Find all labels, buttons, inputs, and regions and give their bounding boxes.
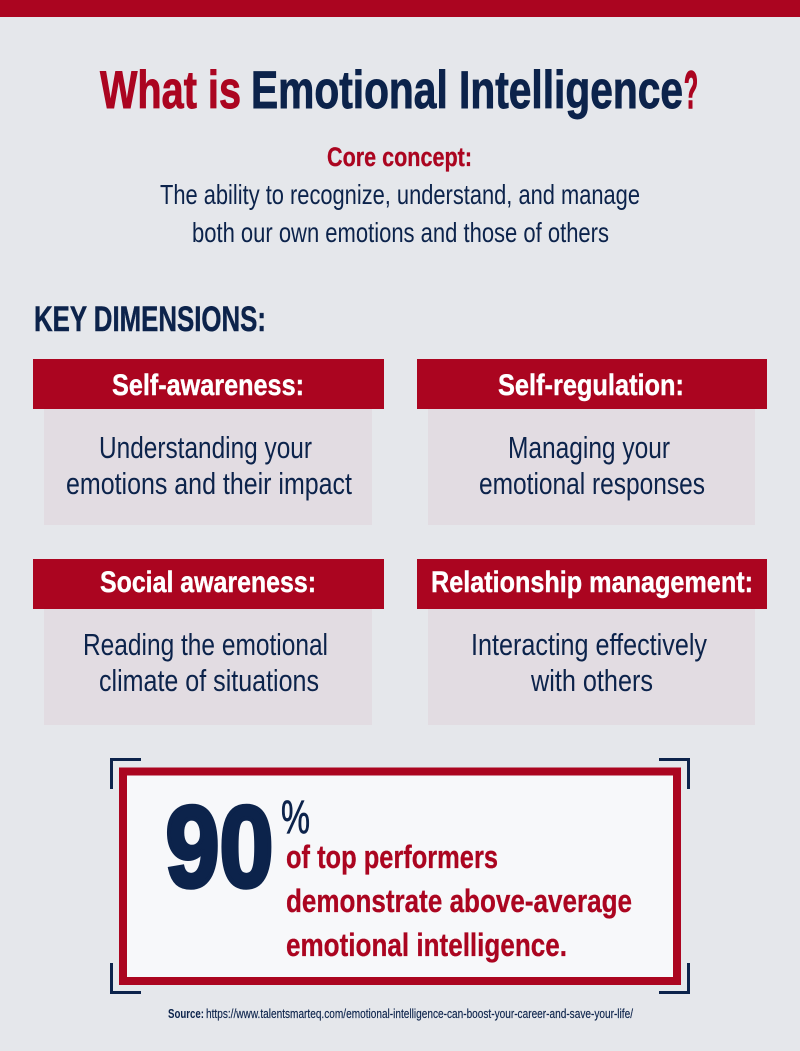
panel: self-awareness [33,359,384,525]
panel: self-awareness: Self-awareness: [112,369,304,402]
panel: self-regulation [417,359,767,525]
panel: social awareness: Social awareness: [100,566,316,599]
corner brackets [112,760,688,992]
title: Emotional Intelligence [251,61,683,120]
statistic text [286,839,632,963]
panel: relationship management: Interacting effectively [471,627,707,662]
callout frame [123,772,677,981]
panel: self-regulation: emotional responses [479,466,705,501]
core concept text block: both our own emotions and those of others [192,217,609,248]
title [100,61,698,120]
panel: relationship management: with others [530,663,653,698]
statistic text: of top performers [286,839,498,875]
big number 90: 90 [166,784,274,912]
panel: social awareness: climate of situations [99,663,319,698]
panel: self-awareness: Understanding your [99,430,312,465]
panel: self-regulation: Self-regulation: [498,369,684,402]
panel: social awareness: Reading the emotional [83,627,328,662]
panel: self-awareness: emotions and their impact [66,466,352,501]
percent sign: % [281,790,310,843]
top bar [0,0,800,17]
source line: Source: [168,1006,204,1021]
panel: social awareness [33,559,384,725]
text: ? [684,61,698,120]
panel: self-regulation: Managing your [508,430,670,465]
statistic text: emotional intelligence. [286,927,567,963]
panel: relationship management [417,559,767,725]
core concept text block: Core concept: [327,142,472,172]
callout: 90 percent statistic [112,760,688,992]
statistic text: demonstrate above-average [286,883,632,919]
title: What is [100,61,241,120]
core concept text block: The ability to recognize, understand, and manage [160,179,640,210]
source line: https://www.talentsmarteq.com/emotional-intelligence-can-boost-your-career-and-save-your-life/ [206,1006,633,1021]
core concept text block [160,142,640,248]
heading: key dimensions: KEY DIMENSIONS: [34,300,266,339]
